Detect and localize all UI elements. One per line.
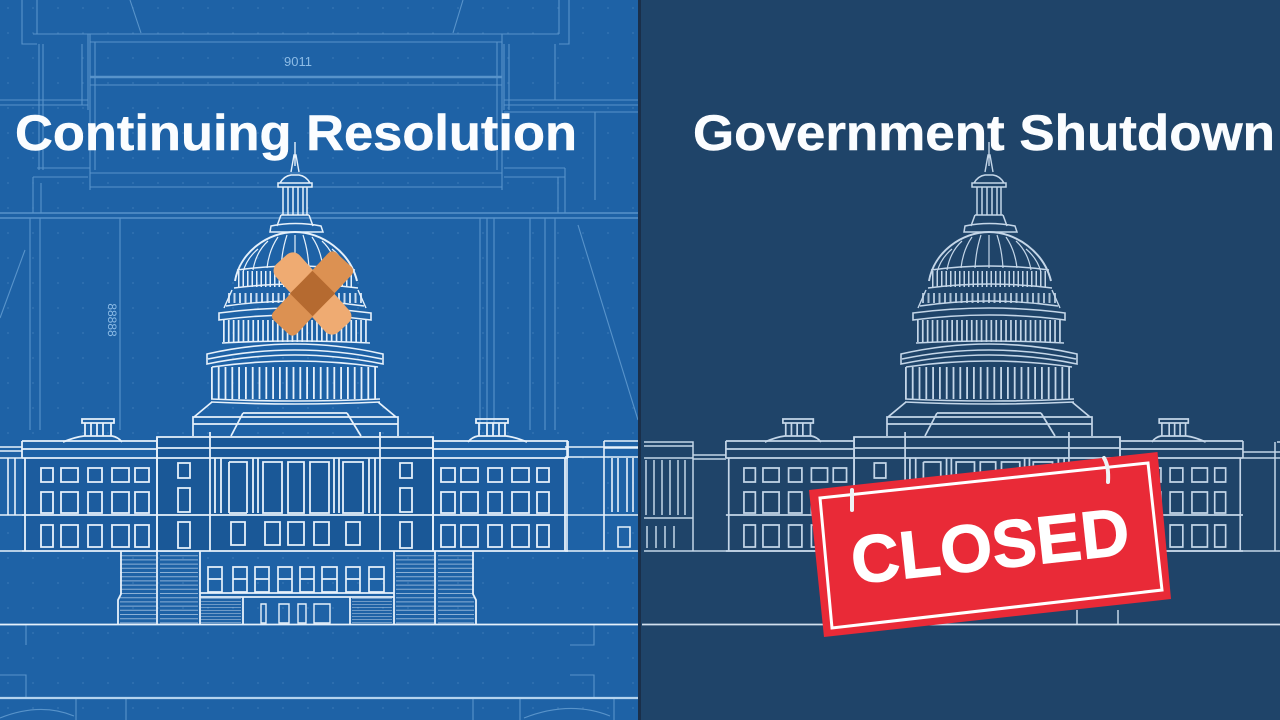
shutdown side wings: [644, 442, 1280, 624]
mirrored drawing label: 9011: [284, 54, 312, 69]
sign: closed: CLOSED: [847, 494, 1133, 599]
panel: government shutdown background: [639, 0, 1280, 720]
blueprint grid backdrop: [0, 0, 640, 720]
steps and basement: [118, 551, 476, 624]
capitol building: shutdown line drawing: [644, 142, 1280, 624]
far side wings: [0, 441, 640, 551]
panel: continuing resolution background: [0, 0, 639, 720]
heading: continuing resolution: Continuing Resolution: [15, 105, 577, 161]
vertical drawing label: 88888: [105, 303, 119, 337]
ground line right: [642, 624, 1280, 626]
ground line left: [0, 624, 639, 626]
heading: government shutdown: Government Shutdown: [693, 105, 1275, 161]
panel divider: [638, 0, 641, 720]
icon: sign hanger right: [1104, 458, 1108, 482]
icon: crossed bandage: [269, 249, 356, 338]
capitol building: blueprint line drawing: [0, 142, 640, 624]
base line left: [0, 697, 639, 699]
sign: closed: [809, 452, 1171, 637]
icon: sign hanger left: [850, 490, 854, 510]
